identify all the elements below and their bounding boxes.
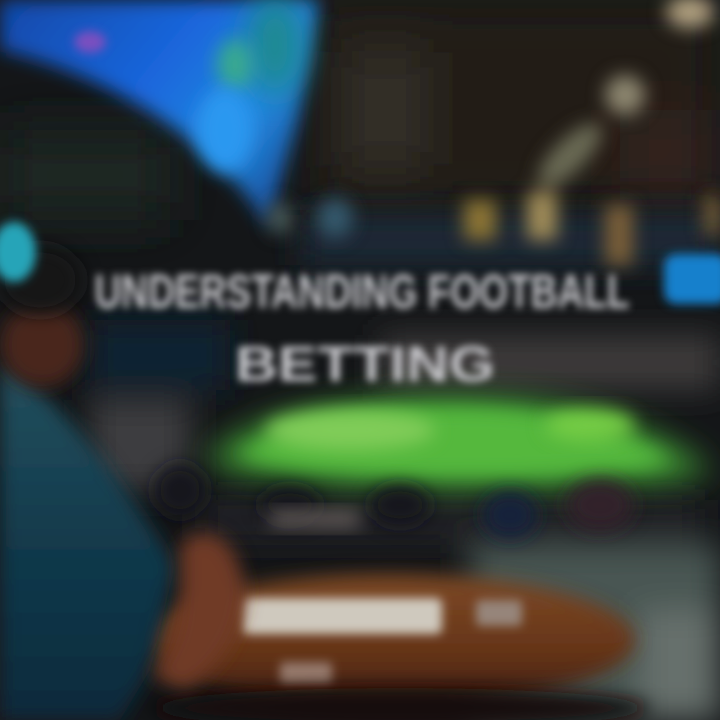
title: blurred headline <box>94 266 630 392</box>
paper: lower slip <box>280 662 332 684</box>
table: round wooden table <box>145 510 650 720</box>
pitch: green field <box>205 398 712 488</box>
person: man with headset seen from behind <box>0 222 245 720</box>
icon: cyan headset <box>0 222 36 282</box>
paper: white slip <box>242 598 442 634</box>
spectators: dark silhouettes <box>154 464 634 539</box>
lights: warm ceiling lamps <box>268 0 720 265</box>
paper: small slip <box>476 600 522 626</box>
icon: curved blue screen <box>0 0 318 228</box>
mid band: stands <box>90 215 720 720</box>
ceiling: brown rafters <box>0 0 720 220</box>
title: blurred headline: BETTING <box>235 336 495 392</box>
panel: blue side screen <box>664 254 720 304</box>
